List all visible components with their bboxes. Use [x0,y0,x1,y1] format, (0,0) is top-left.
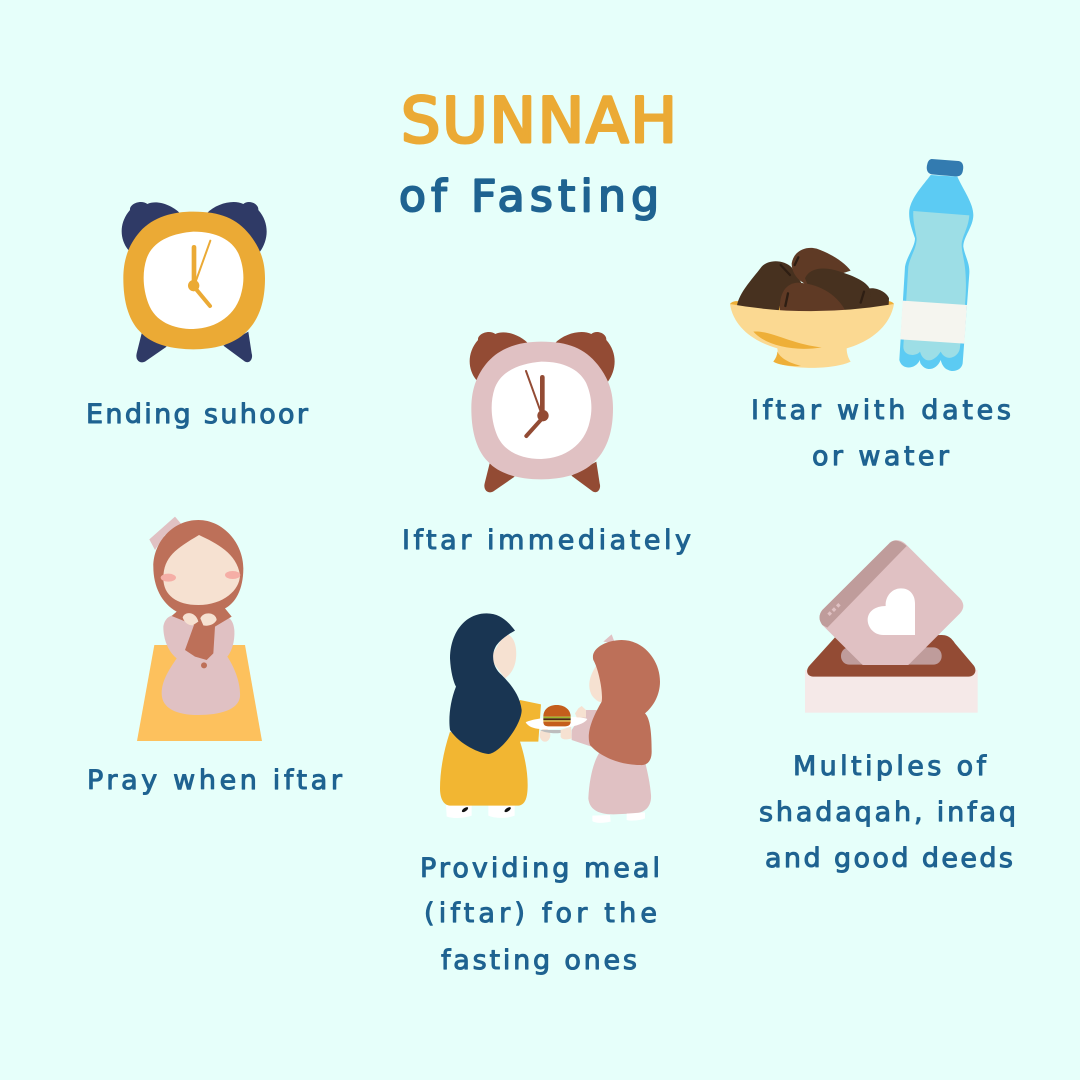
label: multiples of shadaqah: shadaqah, infaq [759,797,1016,828]
icon: water bottle [899,159,973,371]
panel: ending suhoor [86,202,309,430]
icon: dates in bowl [730,248,894,368]
title: SUNNAH [401,84,677,157]
label: providing meal [420,853,660,976]
icon: donation box with heart card [805,540,978,713]
label: multiples of shadaqah [759,751,1016,874]
label: providing meal: fasting ones [441,945,637,976]
label: ending suhoor: Ending suhoor [86,399,309,430]
title: of Fasting [399,171,659,222]
panel: pray when iftar [87,517,343,796]
label: iftar with dates or water: or water [812,441,950,472]
panel: iftar immediately [402,332,691,556]
label: providing meal: (iftar) for the [424,898,657,929]
label: multiples of shadaqah: and good deeds [765,843,1013,874]
label: iftar with dates or water [751,395,1011,472]
icon: women sharing a meal [440,613,660,823]
label: pray when iftar: Pray when iftar [87,765,343,796]
label: iftar immediately: Iftar immediately [402,525,691,556]
title [399,84,677,222]
label: providing meal: Providing meal [420,853,660,884]
panel: providing meal [420,613,660,976]
icon: yellow alarm clock [122,202,267,362]
icon: pink alarm clock [470,332,615,492]
label: multiples of shadaqah: Multiples of [793,751,987,782]
panel: iftar with dates or water [730,159,1011,472]
label: iftar with dates or water: Iftar with dates [751,395,1011,426]
panel: multiples of shadaqah [759,540,1016,874]
icon: praying woman on mat [137,517,262,741]
